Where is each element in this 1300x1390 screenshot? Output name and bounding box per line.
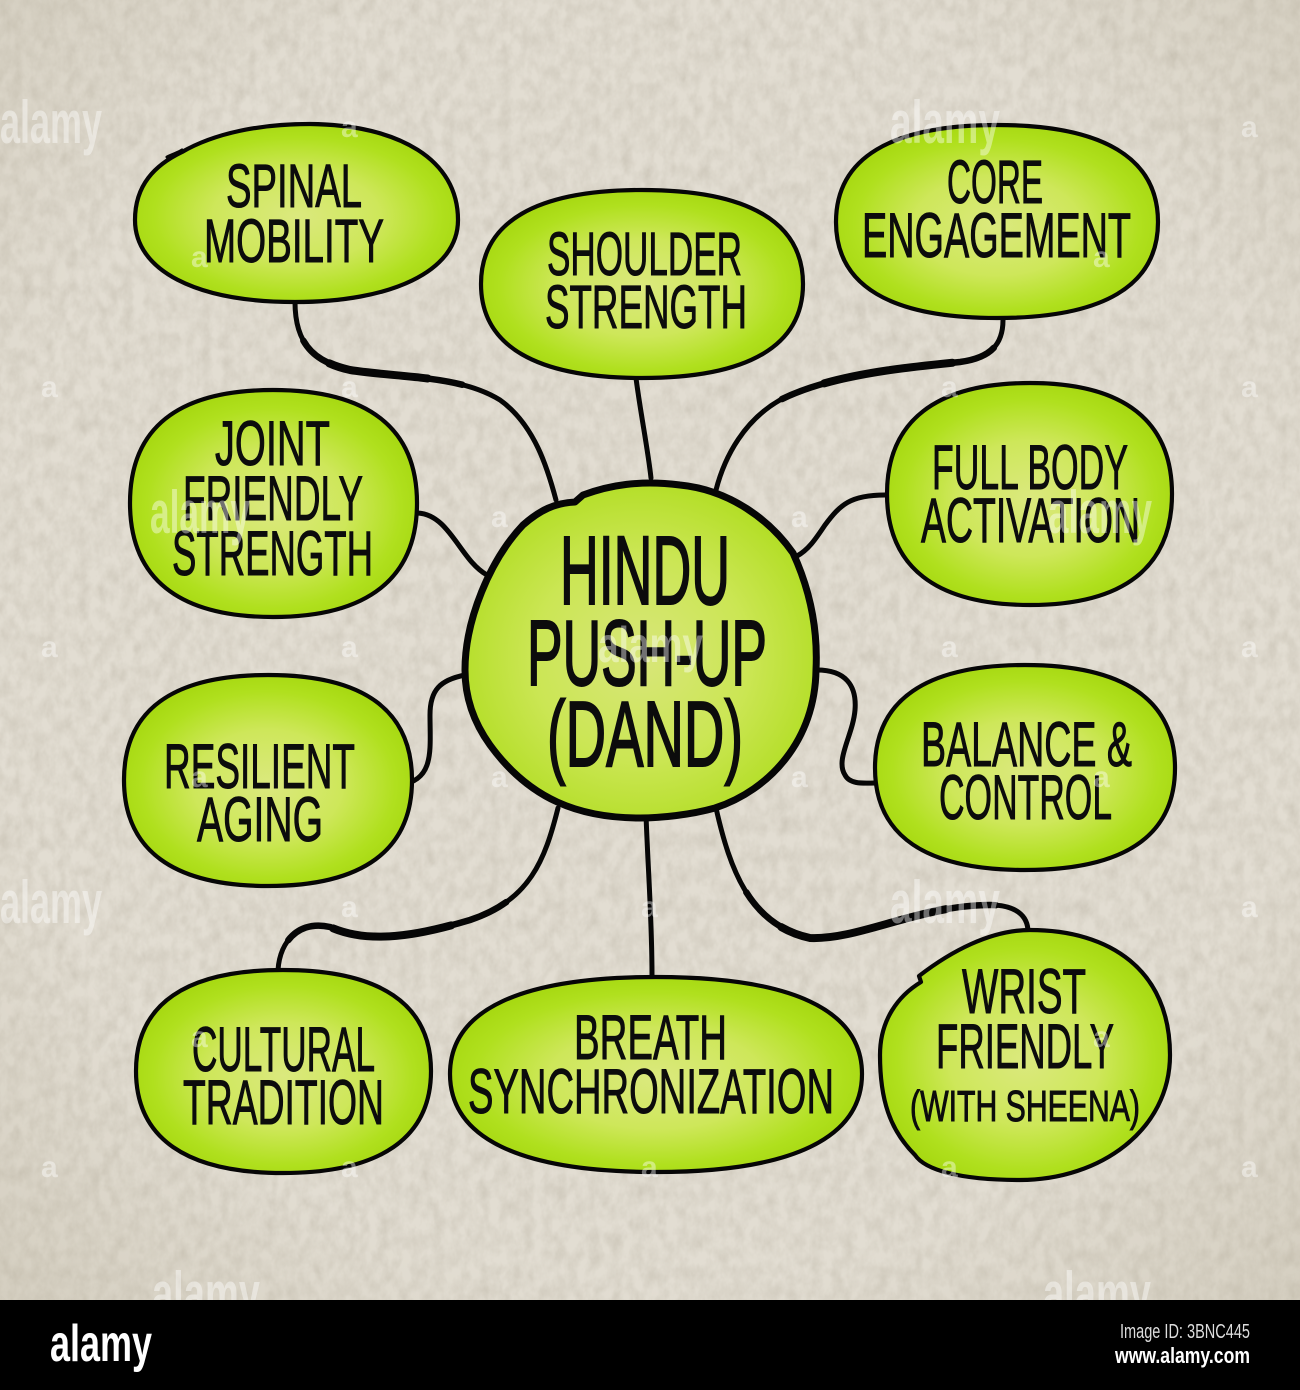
node: breath synchronization: SYNCHRONIZATION bbox=[468, 1057, 834, 1127]
watermarks: a bbox=[191, 1021, 208, 1054]
node: joint friendly strength: STRENGTH bbox=[172, 519, 373, 589]
watermarks: alamy bbox=[598, 617, 703, 673]
footer bar: alamy bbox=[50, 1315, 152, 1373]
node: resilient aging: RESILIENT bbox=[164, 732, 355, 802]
watermarks: a bbox=[941, 631, 958, 664]
watermarks: a bbox=[941, 1151, 958, 1184]
watermarks: a bbox=[1093, 761, 1110, 794]
node: cultural tradition: TRADITION bbox=[183, 1068, 384, 1138]
node: shoulder strength bbox=[481, 190, 803, 378]
footer bar: Image ID: 3BNC445 bbox=[1120, 1321, 1250, 1343]
node: core engagement bbox=[836, 125, 1158, 318]
node: full body activation bbox=[887, 383, 1172, 605]
watermarks: a bbox=[1241, 371, 1258, 404]
watermarks: a bbox=[491, 761, 508, 794]
watermarks: alamy bbox=[152, 1260, 260, 1327]
footer bar bbox=[0, 1300, 1300, 1390]
node: joint friendly strength bbox=[130, 390, 417, 617]
connector lines bbox=[278, 302, 1028, 975]
watermarks: a bbox=[41, 371, 58, 404]
node: core engagement: ENGAGEMENT bbox=[862, 201, 1131, 271]
node: wrist friendly: WRIST bbox=[962, 957, 1086, 1027]
watermarks: alamy bbox=[150, 479, 250, 546]
watermarks: a bbox=[41, 631, 58, 664]
node: joint friendly strength: FRIENDLY bbox=[183, 464, 363, 534]
node: cultural tradition: CULTURAL bbox=[192, 1015, 375, 1085]
watermarks: a bbox=[41, 1151, 58, 1184]
watermarks: a bbox=[641, 891, 658, 924]
central node: hindu push-up: (DAND) bbox=[547, 682, 743, 786]
node: shoulder strength: STRENGTH bbox=[545, 273, 747, 341]
node: wrist friendly: (WITH SHEENA) bbox=[910, 1082, 1140, 1131]
node: breath synchronization: BREATH bbox=[574, 1003, 727, 1073]
watermarks: a bbox=[791, 501, 808, 534]
node: balance and control: BALANCE & bbox=[921, 710, 1132, 780]
watermarks: alamy bbox=[0, 89, 102, 156]
watermarks: a bbox=[341, 631, 358, 664]
watermarks: a bbox=[1241, 1151, 1258, 1184]
node: spinal mobility bbox=[135, 124, 458, 302]
watermarks: alamy bbox=[1043, 1260, 1151, 1327]
node: joint friendly strength: JOINT bbox=[215, 409, 330, 479]
watermarks: a bbox=[191, 241, 208, 274]
node: full body activation: ACTIVATION bbox=[921, 486, 1140, 556]
watermarks: a bbox=[791, 761, 808, 794]
watermarks: alamy bbox=[890, 89, 1000, 156]
node: core engagement: CORE bbox=[947, 148, 1043, 216]
watermarks: a bbox=[1241, 891, 1258, 924]
watermarks: a bbox=[191, 761, 208, 794]
node: balance and control: CONTROL bbox=[939, 763, 1112, 833]
node: resilient aging bbox=[124, 675, 412, 886]
watermarks: a bbox=[341, 1151, 358, 1184]
watermarks: a bbox=[341, 891, 358, 924]
watermarks: a bbox=[341, 111, 358, 144]
watermarks: alamy bbox=[890, 869, 1000, 936]
node: full body activation: FULL BODY bbox=[932, 433, 1128, 503]
node: resilient aging: AGING bbox=[197, 785, 323, 855]
footer bar: www.alamy.com bbox=[1114, 1343, 1250, 1368]
watermarks: a bbox=[641, 1151, 658, 1184]
node: breath synchronization bbox=[450, 977, 862, 1172]
watermarks: a bbox=[941, 371, 958, 404]
node: wrist friendly: FRIENDLY bbox=[936, 1012, 1114, 1082]
watermarks: a bbox=[341, 371, 358, 404]
watermarks: alamy bbox=[0, 869, 102, 936]
node: spinal mobility: MOBILITY bbox=[204, 207, 384, 275]
central node: hindu push-up: PUSH-UP bbox=[527, 601, 767, 705]
node: balance and control bbox=[875, 665, 1175, 870]
node: wrist friendly bbox=[880, 930, 1170, 1180]
central node: hindu push-up: HINDU bbox=[560, 516, 730, 625]
central node: hindu push-up bbox=[465, 483, 816, 818]
watermarks: alamy bbox=[1048, 479, 1152, 546]
node: shoulder strength: SHOULDER bbox=[547, 220, 742, 288]
watermarks: a bbox=[491, 501, 508, 534]
watermarks: a bbox=[1093, 241, 1110, 274]
node: cultural tradition bbox=[136, 970, 431, 1173]
node: spinal mobility: SPINAL bbox=[226, 152, 362, 220]
watermarks: a bbox=[1241, 111, 1258, 144]
watermarks: a bbox=[1093, 1021, 1110, 1054]
watermarks: a bbox=[1241, 631, 1258, 664]
